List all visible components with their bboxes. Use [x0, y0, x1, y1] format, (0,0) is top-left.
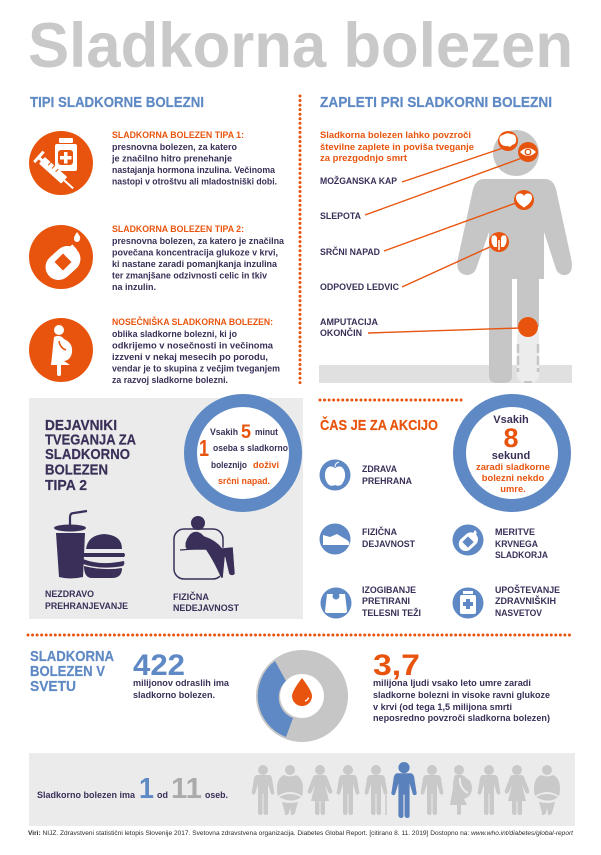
- callout: every 5 minutes: oseba s sladkorno: [213, 442, 288, 453]
- text: gestational: oblika sladkorne bolezni, ki jo: [112, 329, 237, 340]
- heading: risk factors: [45, 417, 136, 494]
- item: healthy diet: PREHRANA: [362, 476, 412, 487]
- panel: complications: [319, 94, 572, 383]
- label: heart attack: [320, 203, 516, 258]
- text: complications intro: številne zaplete in poviša tveganje: [320, 142, 474, 153]
- stat: 3.7 million: milijona ljudi vsako leto umre zaradi: [373, 678, 531, 689]
- text: type 1: je značilno hitro prenehanje: [111, 154, 232, 164]
- heading: risk factors: DEJAVNIKI: [45, 417, 117, 434]
- label: amputation: AMPUTACIJA: [320, 317, 378, 328]
- item: blood sugar measurement: KRVNEGA: [495, 539, 538, 550]
- label: physical inactivity: [173, 591, 239, 614]
- icon: kidneys: [489, 232, 509, 252]
- heading: complications: ZAPLETI PRI SLADKORNI BOLEZNI: [320, 94, 552, 111]
- callout: every 5 minutes: 1: [199, 435, 209, 461]
- item: healthy diet: [320, 460, 412, 490]
- stat: 3.7 million: sladkorne bolezni in visoke ravni glukoze: [373, 690, 550, 701]
- icon: pregnant woman: [29, 318, 93, 382]
- callout: every 5 minutes: boleznijo: [211, 459, 247, 470]
- item: healthy diet: ZDRAVA: [362, 464, 397, 475]
- callout: every 8 seconds: umre.: [500, 483, 526, 494]
- text: gestational: izzveni v nekaj mesecih po porodu,: [112, 352, 268, 363]
- text: gestational: vendar je to skupina z večjim tveganjem: [112, 364, 280, 374]
- title: Sladkorna bolezen: [28, 11, 573, 81]
- text: type 1: presnovna bolezen, za katero: [112, 142, 237, 153]
- label: stroke: [320, 148, 503, 187]
- heading: risk factors: TVEGANJA ZA: [45, 432, 136, 448]
- callout: every 8 seconds: 8: [503, 423, 519, 453]
- item: physical activity: FIZIČNA: [362, 526, 397, 538]
- heading: risk factors: TIPA 2: [45, 477, 87, 494]
- stat: 422 million: milijonov odraslih ima: [133, 678, 230, 689]
- icon: blood drop: [292, 678, 312, 706]
- heading: worldwide: [30, 648, 114, 695]
- label: kidney failure: ODPOVED LEDVIC: [320, 282, 399, 293]
- text: 1 in 11: [37, 773, 228, 805]
- callout: every 5 minutes: srčni napad.: [218, 475, 270, 486]
- stat: 3.7 million: 3,7: [373, 649, 420, 682]
- text: type 2: presnovna bolezen, za katero je značilna: [112, 236, 285, 247]
- callout: every 5 minutes: doživi: [253, 459, 279, 470]
- label: physical inactivity: FIZIČNA: [173, 591, 209, 603]
- stat: 3.7 million: neposredno povzroči sladkorna bolezen): [373, 713, 550, 724]
- icon: junk food: [54, 511, 125, 578]
- panel: time to act: [320, 400, 564, 619]
- item: avoiding excess weight: TELESNI TEŽI: [362, 607, 421, 619]
- panel: 1 in 11 people: [29, 753, 575, 826]
- item: following medical advice: ZDRAVNIŠKIH: [495, 595, 556, 607]
- icon: sedentary person: [174, 516, 235, 579]
- item: physical activity: [320, 524, 415, 554]
- heading: risk factors: BOLEZEN: [45, 462, 108, 478]
- stat: 3.7 million: [373, 649, 550, 724]
- panel: risk factors: [29, 398, 303, 619]
- text: type 1: SLADKORNA BOLEZEN TIPA 1:: [112, 130, 244, 141]
- panel: diabetes worldwide: [30, 648, 550, 742]
- text: gestational: odkrijemo v nosečnosti in večinoma: [112, 340, 274, 352]
- heading: worldwide: BOLEZEN V: [30, 663, 105, 680]
- label: physical inactivity: NEDEJAVNOST: [173, 603, 239, 614]
- text: type 2: ki nastane zaradi pomanjkanja inzulina: [112, 259, 278, 270]
- item: avoiding excess weight: PRETIRANI: [362, 596, 410, 607]
- label: blindness: [320, 158, 522, 222]
- heading: time to act: ČAS JE ZA AKCIJO: [320, 416, 438, 434]
- text: type 2: SLADKORNA BOLEZEN TIPA 2:: [112, 224, 244, 235]
- text: type 1: [111, 130, 277, 188]
- text: type 2: ter zmanjšane odzivnosti celic in tkiv: [112, 270, 268, 282]
- label: amputation: [320, 317, 520, 339]
- text: 1 in 11: Sladkorno bolezen ima: [37, 790, 136, 801]
- callout: every 5 minutes: 5: [241, 422, 251, 443]
- callout: every 8 seconds: sekund: [492, 450, 530, 462]
- text: type 2: [112, 224, 285, 293]
- item: avoiding excess weight: [320, 585, 421, 619]
- label: blindness: SLEPOTA: [320, 211, 361, 222]
- label: stroke: MOŽGANSKA KAP: [320, 175, 398, 187]
- text: gestational: [112, 316, 280, 386]
- donut chart: [256, 650, 348, 742]
- icon: amputation marker: [518, 317, 538, 337]
- text: type 1: nastajanja hormona inzulina. Večinoma: [112, 165, 276, 176]
- item: blood sugar measurement: MERITVE: [495, 527, 536, 538]
- icon: eye: [518, 142, 538, 162]
- icon: heart: [514, 190, 534, 210]
- callout: every 8 seconds: Vsakih: [493, 414, 529, 426]
- label: heart attack: SRČNI NAPAD: [320, 246, 380, 258]
- item: blood sugar measurement: SLADKORJA: [495, 550, 548, 561]
- icon: glucose meter: [29, 225, 93, 289]
- human figure: [457, 130, 572, 383]
- text: complications intro: Sladkorna bolezen lahko povzroči: [320, 130, 471, 141]
- text: gestational: NOSEČNIŠKA SLADKORNA BOLEZEN:: [112, 316, 273, 328]
- label: unhealthy diet: NEZDRAVO: [45, 589, 94, 600]
- icon: syringe and medicine: [29, 131, 93, 195]
- callout: every 8 seconds: zaradi sladkorne: [476, 461, 550, 472]
- panel: types of diabetes: [29, 94, 285, 386]
- item: following medical advice: UPOŠTEVANJE: [495, 584, 561, 596]
- item: blood sugar measurement: [452, 524, 548, 561]
- text: 1 in 11: 11: [171, 773, 202, 805]
- text: complications intro: [320, 130, 474, 164]
- item: following medical advice: NASVETOV: [495, 608, 543, 619]
- callout: every 5 minutes: [190, 400, 296, 506]
- label: kidney failure: [320, 246, 492, 293]
- text: 1 in 11: od: [157, 790, 168, 801]
- text: complications intro: za prezgodnjo smrt: [320, 153, 408, 164]
- text: type 1: nastopi v otroštvu ali mladostniški dobi.: [112, 176, 277, 188]
- heading: risk factors: SLADKORNO: [45, 446, 130, 463]
- label: unhealthy diet: [45, 589, 129, 612]
- heading: worldwide: SLADKORNA: [30, 648, 114, 665]
- callout: every 5 minutes: minut: [255, 426, 278, 437]
- heading: worldwide: SVETU: [30, 678, 76, 695]
- callout: every 8 seconds: bolezni nekdo: [482, 472, 545, 483]
- text: 1 in 11: 1: [139, 773, 154, 805]
- item: avoiding excess weight: IZOGIBANJE: [362, 585, 417, 596]
- label: amputation: OKONČIN: [320, 327, 362, 339]
- amputated leg: [517, 327, 539, 383]
- text: 1 in 11: oseb.: [205, 790, 228, 801]
- stat: 422 million: [133, 649, 230, 701]
- heading: types: TIPI SLADKORNE BOLEZNI: [30, 94, 204, 111]
- icon: brain: [498, 131, 518, 151]
- stat: 422 million: 422: [133, 649, 185, 682]
- ground: [319, 365, 572, 383]
- callout: every 5 minutes: Vsakih: [210, 426, 238, 437]
- callout: every 8 seconds: [460, 400, 564, 506]
- stat: 3.7 million: v krvi (od tega 1,5 milijona smrti: [373, 702, 512, 713]
- stat: 422 million: sladkorno bolezen.: [133, 690, 215, 701]
- item: following medical advice: [452, 584, 561, 619]
- label: unhealthy diet: PREHRANJEVANJE: [45, 601, 129, 612]
- text: gestational: za razvoj sladkorne bolezni.: [112, 375, 228, 386]
- item: physical activity: DEJAVNOST: [362, 539, 415, 550]
- pictogram: eleven people: [252, 762, 560, 818]
- source note: Viri: NIJZ. Zdravstveni statistični letopis Slovenije 2017. Svetovna zdravstvena organizacija. Diabetes Global Report. [citirano 8. 11. 2019] Dostopno na: www.who.int/diabetes/global-report: [28, 830, 574, 837]
- text: type 2: povečana koncentracija glukoze v krvi,: [112, 248, 278, 258]
- text: type 2: na inzulin.: [112, 282, 156, 293]
